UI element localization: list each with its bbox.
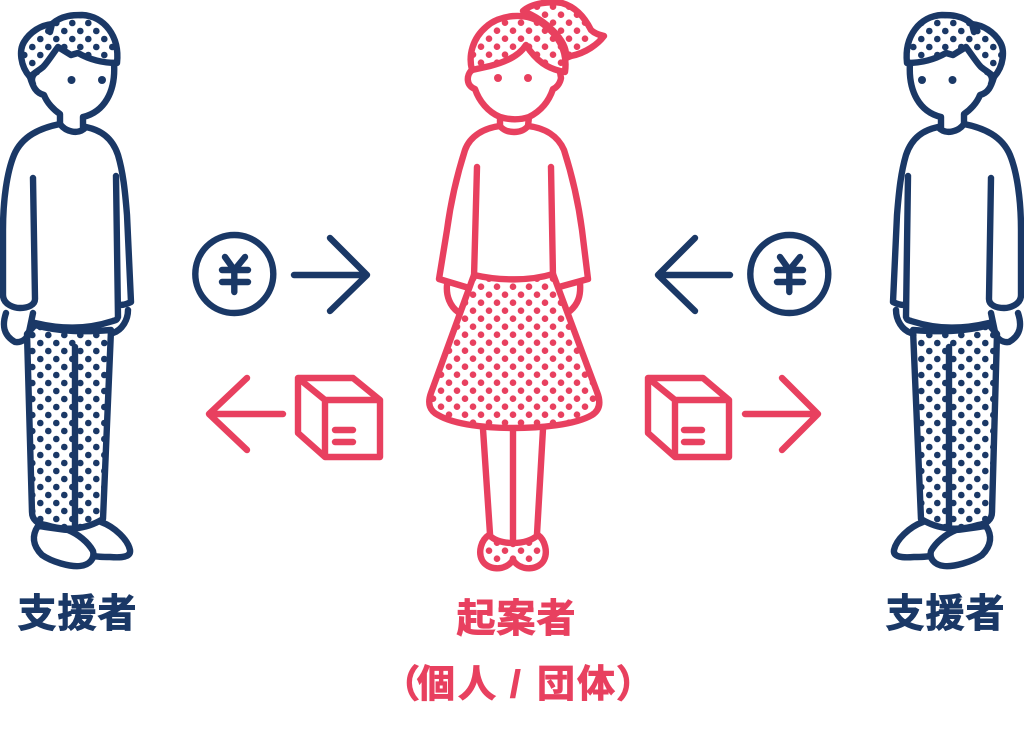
arrow: reward towards right supporter — [745, 378, 818, 450]
shirt — [893, 124, 1021, 328]
face and neck — [468, 70, 561, 126]
icon: left yen coin — [195, 235, 273, 313]
arrow: money towards project owner — [294, 238, 367, 311]
shoes — [94, 522, 130, 557]
face and neck — [910, 24, 994, 128]
pants — [913, 325, 997, 529]
hair — [21, 15, 117, 77]
label: individual or organisation: （個人/団体） — [382, 664, 654, 706]
legs — [483, 429, 543, 544]
shoes — [480, 535, 546, 568]
hands — [896, 310, 1020, 342]
shirt — [3, 124, 131, 328]
eyes — [918, 76, 956, 84]
face and neck — [30, 24, 114, 128]
skirt — [429, 274, 599, 428]
right supporter figure — [893, 15, 1021, 566]
hair — [907, 15, 1003, 77]
icon: right reward box — [648, 378, 729, 457]
central project owner figure — [429, 2, 604, 568]
hair — [471, 16, 566, 72]
pants centre line — [72, 347, 78, 525]
shoes — [894, 522, 930, 557]
arrow: money towards project owner from right — [658, 238, 730, 311]
pants — [27, 325, 111, 529]
icon: left reward box — [298, 378, 380, 457]
icon: right yen coin — [750, 235, 828, 313]
hands — [447, 283, 580, 312]
eyes — [68, 76, 106, 84]
hands — [4, 310, 128, 342]
ponytail — [523, 2, 604, 58]
left supporter figure — [3, 15, 131, 566]
label: project owner: 起案者 — [456, 598, 577, 641]
eyes — [494, 74, 532, 82]
blouse — [439, 126, 588, 288]
label: left supporter: 支援者 — [17, 593, 138, 636]
label: right supporter: 支援者 — [885, 593, 1006, 636]
pants centre line — [946, 347, 952, 525]
arrow: reward towards left supporter — [209, 378, 283, 450]
